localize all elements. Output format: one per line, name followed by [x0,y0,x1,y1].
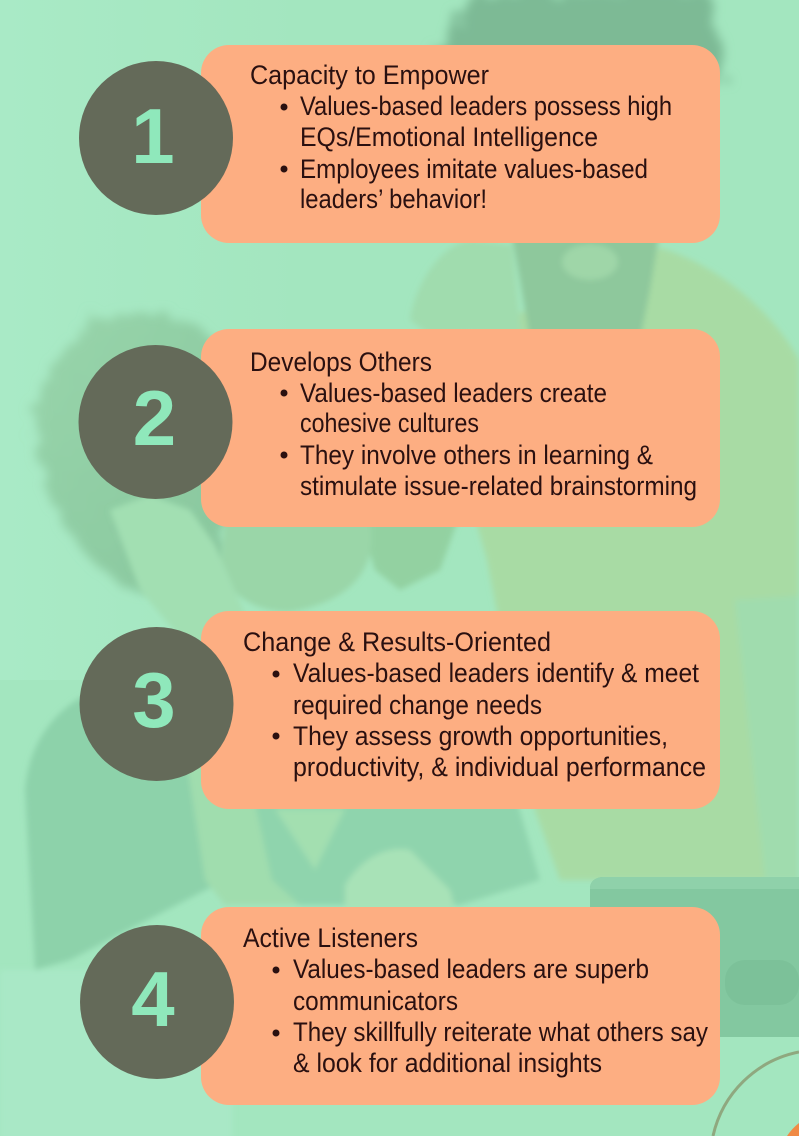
panel: change and results-oriented [201,611,720,809]
bullet text: & look for additional insights [293,1048,602,1078]
man's shirt [470,248,799,880]
white laptop [0,970,232,1136]
bullet text: Values-based leaders are superb [293,954,649,984]
heading: Capacity to Empower [250,60,489,90]
dark laptop [590,877,799,1037]
woman's hand on table [345,849,455,908]
bullet text [272,1017,708,1078]
heading: Change & Results-Oriented [243,627,551,657]
woman's neckline [275,809,345,870]
left window light [0,0,300,680]
bullet text: They assess growth opportunities, [293,721,668,751]
number badge 2: 2 [133,374,176,462]
panel: capacity to empower [201,45,720,243]
bullet text: stimulate issue-related brainstorming [300,471,697,501]
number badge 4 [80,925,234,1079]
man's face and neck [511,243,660,329]
bullet text: cohesive cultures [300,408,479,438]
bullet text: They involve others in learning & [300,440,653,470]
woman's arm [188,767,296,906]
bullet text: Values-based leaders identify & meet [293,658,699,688]
number badge 3: 3 [132,656,176,744]
woman's hair [35,311,241,590]
woman's neck shadow [360,520,458,590]
number badge 2 [78,345,232,499]
number badge 3 [80,627,234,781]
laptop logo shadow [725,960,799,1005]
panel: active listeners [201,907,720,1105]
bullet text: Employees imitate values-based [300,154,648,184]
man's hair [437,0,730,84]
bullet text [280,91,672,152]
heading: Develops Others [250,347,432,377]
bullet text: required change needs [293,690,542,720]
bullet text: Values-based leaders create [300,378,607,408]
bullet text [272,721,706,782]
bullet text: communicators [293,986,458,1016]
bullet text [280,378,607,438]
woman's shirt left [25,650,240,970]
bullet text: They skillfully reiterate what others say [293,1017,708,1047]
bullet text: EQs/Emotional Intelligence [300,122,598,152]
heading: Active Listeners [243,923,418,953]
laptop top band [590,877,799,889]
number badge 1 [79,61,233,215]
bullet text: Values-based leaders possess high [300,91,672,121]
decorative arc [713,1052,799,1136]
bullet text [272,658,699,720]
woman's face [220,520,372,612]
orange corner shape [787,1123,799,1136]
bullet text: leaders’ behavior! [300,184,487,214]
bullet text [272,954,649,1016]
panel: develops others [201,329,720,527]
woman's torso [256,809,540,906]
bullet text [280,440,697,501]
man's sleeve [738,599,796,877]
woman's hand [110,495,250,650]
bullet text [280,154,648,214]
number badge 4: 4 [131,955,175,1043]
man's hand [410,240,522,340]
man's nose [562,244,618,280]
number badge 1: 1 [131,92,175,180]
bullet text: productivity, & individual performance [293,752,706,782]
